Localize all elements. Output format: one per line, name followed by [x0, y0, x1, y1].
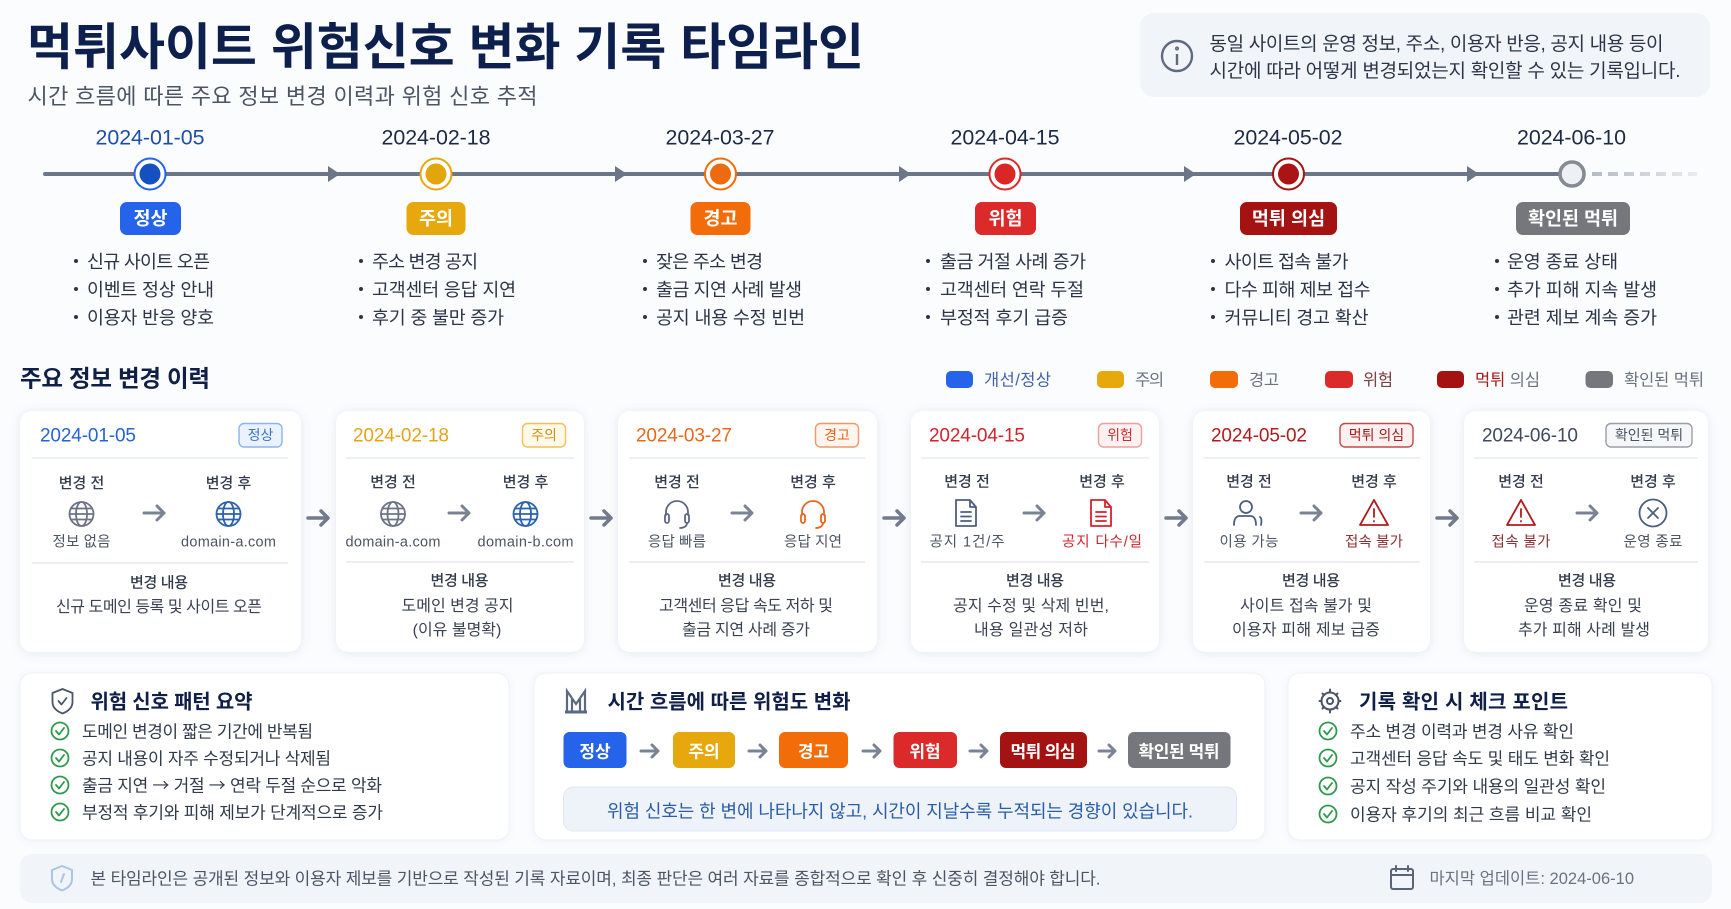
milestone 2024-03-27: 2024-03-27 — [666, 126, 774, 150]
icon: document after — [1091, 500, 1111, 526]
milestone 2024-02-18: 주소 변경 공지 — [372, 251, 478, 272]
panel: checkpoints: 기록 확인 시 체크 포인트 — [1359, 690, 1568, 714]
footer — [20, 854, 1712, 903]
card: 2024-05-02: 2024-05-02 — [1211, 426, 1307, 446]
card: 2024-05-02 — [1193, 411, 1430, 652]
checklist: 공지 내용이 자주 수정되거나 삭제됨 — [82, 750, 331, 768]
arrow — [1166, 511, 1186, 525]
milestone 2024-05-02: 먹튀 의심 — [1252, 208, 1325, 229]
checklist: 고객센터 응답 속도 및 태도 변화 확인 — [1350, 750, 1610, 768]
icon: document before — [956, 500, 976, 526]
card: 2024-05-02: 변경 전 — [1226, 474, 1272, 490]
card: 2024-04-15: 공지 1건/주 — [930, 534, 1004, 550]
card: 2024-03-27 — [618, 411, 877, 652]
milestone 2024-02-18: 2024-02-18 — [382, 126, 490, 150]
card: 2024-06-10: 2024-06-10 — [1482, 426, 1578, 446]
legend: 위험 — [1363, 370, 1393, 390]
note: 위험 신호는 한 변에 나타나지 않고, 시간이 지날수록 누적되는 경향이 있습니다. — [607, 802, 1193, 822]
milestone 2024-05-02: 다수 피해 제보 접수 — [1224, 279, 1370, 300]
card: 2024-01-05: 2024-01-05 — [40, 426, 136, 446]
milestone 2024-05-02: 2024-05-02 — [1234, 126, 1342, 150]
card: 2024-06-10: 추가 피해 사례 발생 — [1518, 621, 1650, 639]
card: 2024-03-27: 변경 후 — [790, 474, 836, 491]
legend: 주의 — [1135, 370, 1164, 390]
card: 2024-01-05: 변경 내용 — [130, 574, 188, 592]
panel: risk pattern summary — [20, 673, 509, 840]
icon: globe before — [381, 502, 405, 526]
milestone 2024-03-27 — [643, 126, 805, 328]
checklist: 주소 변경 이력과 변경 사유 확인 — [1350, 722, 1574, 742]
card: 2024-04-15: 공지 수정 및 삭제 빈번, — [953, 597, 1109, 615]
milestone 2024-04-15: 2024-04-15 — [950, 126, 1060, 150]
stage flow: 주의 — [688, 742, 720, 762]
milestone 2024-05-02: 커뮤니티 경고 확산 — [1224, 307, 1369, 328]
checklist — [1320, 722, 1610, 824]
card: 2024-03-27: 출금 지연 사례 증가 — [682, 621, 810, 639]
stage flow: 먹튀 의심 — [1010, 742, 1076, 762]
icon: chart — [565, 691, 587, 712]
checklist: 도메인 변경이 짧은 기간에 반복됨 — [82, 722, 313, 742]
card: 2024-03-27: 고객센터 응답 속도 저하 및 — [659, 597, 833, 615]
card: 2024-03-27: 응답 지연 — [784, 534, 842, 550]
stage flow — [564, 732, 1230, 768]
checklist: 출금 지연 → 거절 → 연락 두절 순으로 악화 — [82, 772, 382, 796]
card: 2024-01-05: 정상 — [248, 427, 273, 443]
card: 2024-04-15 — [911, 411, 1159, 652]
timeline axis — [45, 166, 1697, 182]
legend — [946, 370, 1704, 390]
card: 2024-03-27: 변경 내용 — [718, 572, 776, 590]
card: 2024-06-10: 변경 후 — [1630, 474, 1676, 490]
card: 2024-06-10 — [1464, 411, 1708, 652]
card: 2024-01-05: domain-a.com — [181, 534, 276, 550]
card: 2024-01-05: 변경 후 — [206, 475, 251, 492]
card: 2024-02-18: domain-b.com — [478, 534, 574, 550]
milestone 2024-02-18: 주의 — [419, 208, 453, 229]
card: 2024-06-10: 확인된 먹튀 — [1615, 427, 1683, 443]
milestone 2024-03-27: 출금 지연 사례 발생 — [656, 279, 802, 300]
icon: closed circle — [1640, 500, 1666, 526]
milestone 2024-04-15 — [926, 126, 1086, 328]
icon: warning — [1507, 500, 1535, 525]
icon: footer shield — [52, 866, 72, 890]
arrow — [591, 511, 611, 525]
milestone 2024-04-15: 고객센터 연락 두절 — [940, 279, 1084, 300]
icon: shield — [52, 689, 72, 714]
icon: globe before — [70, 502, 94, 526]
card: 2024-03-27: 응답 빠름 — [648, 534, 706, 550]
panel: risk change over time — [534, 673, 1265, 840]
milestone 2024-06-10: 관련 제보 계속 증가 — [1507, 307, 1657, 328]
milestone 2024-01-05: 이벤트 정상 안내 — [87, 279, 214, 300]
card: 2024-05-02: 변경 내용 — [1282, 572, 1340, 590]
milestone 2024-03-27: 경고 — [703, 208, 738, 229]
milestone 2024-05-02 — [1211, 126, 1370, 328]
milestone 2024-02-18: 고객센터 응답 지연 — [372, 279, 516, 300]
milestone 2024-03-27: 잦은 주소 변경 — [656, 251, 763, 272]
milestone 2024-04-15: 출금 거절 사례 증가 — [940, 251, 1086, 272]
card: 2024-01-05: 신규 도메인 등록 및 사이트 오픈 — [56, 598, 262, 616]
footer: 마지막 업데이트: 2024-06-10 — [1430, 869, 1634, 888]
card: 2024-04-15: 공지 다수/일 — [1062, 534, 1142, 550]
card: 2024-06-10: 운영 종료 확인 및 — [1524, 597, 1642, 615]
icon: headset after — [801, 501, 825, 528]
milestone 2024-03-27: 공지 내용 수정 빈번 — [656, 307, 805, 328]
milestone 2024-01-05: 이용자 반응 양호 — [87, 307, 214, 328]
milestone 2024-06-10: 운영 종료 상태 — [1507, 251, 1618, 272]
icon: headset before — [665, 501, 689, 528]
card: 2024-04-15: 내용 일관성 저하 — [974, 621, 1088, 639]
callout text: 동일 사이트의 운영 정보, 주소, 이용자 반응, 공지 내용 등이 — [1210, 33, 1664, 55]
card: 2024-05-02: 접속 불가 — [1345, 534, 1403, 550]
section heading: 주요 정보 변경 이력 — [20, 366, 210, 392]
card: 2024-04-15: 변경 전 — [944, 474, 990, 490]
milestone 2024-06-10: 확인된 먹튀 — [1528, 208, 1618, 229]
stage flow: 확인된 먹튀 — [1138, 742, 1220, 762]
stage flow: 경고 — [798, 742, 829, 762]
callout text: 시간에 따라 어떻게 변경되었는지 확인할 수 있는 기록입니다. — [1210, 60, 1680, 82]
icon: info — [1162, 41, 1192, 71]
milestone 2024-01-05: 정상 — [133, 208, 168, 229]
icon: globe after — [216, 502, 240, 526]
panel: checkpoints — [1288, 673, 1712, 840]
card: 2024-01-05: 변경 전 — [59, 475, 104, 492]
stage flow: 위험 — [909, 742, 941, 762]
card: 2024-04-15: 변경 후 — [1079, 474, 1125, 490]
note — [564, 787, 1236, 831]
icon: user — [1234, 501, 1262, 525]
milestone 2024-02-18 — [359, 126, 516, 328]
milestone 2024-06-10 — [1495, 126, 1657, 328]
milestone 2024-04-15: 부정적 후기 급증 — [940, 307, 1068, 328]
card: 2024-02-18: domain-a.com — [346, 534, 440, 550]
legend: 경고 — [1249, 370, 1279, 390]
card: 2024-05-02: 먹튀 의심 — [1349, 427, 1404, 443]
timeline — [45, 126, 1697, 328]
card: 2024-02-18: 도메인 변경 공지 — [402, 597, 513, 615]
card: 2024-02-18: 변경 내용 — [430, 572, 489, 590]
arrow — [308, 511, 328, 525]
stage flow: 정상 — [579, 742, 611, 762]
panel: risk change over time: 시간 흐름에 따른 위험도 변화 — [608, 690, 850, 714]
milestone 2024-06-10: 추가 피해 지속 발생 — [1507, 279, 1657, 300]
card: 2024-03-27: 2024-03-27 — [636, 426, 732, 446]
icon: calendar — [1391, 866, 1413, 889]
card: 2024-04-15: 변경 내용 — [1006, 572, 1064, 590]
subtitle: 시간 흐름에 따른 주요 정보 변경 이력과 위험 신호 추적 — [28, 84, 538, 109]
card: 2024-02-18: 2024-02-18 — [353, 426, 449, 446]
icon: gear — [1320, 690, 1340, 712]
footer: 본 타임라인은 공개된 정보와 이용자 제보를 기반으로 작성된 기록 자료이며, 최종 판단은 여러 자료를 종합적으로 확인 후 신중히 결정해야 합니다. — [90, 870, 1100, 888]
callout text — [1210, 33, 1680, 82]
card: 2024-06-10: 운영 종료 — [1624, 534, 1682, 550]
milestone 2024-02-18: 후기 중 불만 증가 — [372, 307, 504, 328]
card: 2024-04-15: 2024-04-15 — [929, 426, 1025, 446]
legend: 먹튀 의심 — [1475, 370, 1540, 390]
info callout — [1140, 13, 1710, 97]
checklist: 부정적 후기와 피해 제보가 단계적으로 증가 — [82, 804, 383, 822]
card: 2024-06-10: 변경 내용 — [1558, 572, 1616, 590]
card: 2024-02-18: (이유 불명확) — [413, 621, 501, 639]
checklist — [52, 722, 383, 822]
card: 2024-03-27: 변경 전 — [654, 474, 700, 491]
milestone 2024-06-10: 2024-06-10 — [1517, 126, 1626, 150]
milestone 2024-01-05: 2024-01-05 — [96, 126, 204, 150]
card: 2024-05-02: 이용자 피해 제보 급증 — [1232, 621, 1380, 639]
title: 먹튀사이트 위험신호 변화 기록 타임라인 — [27, 20, 864, 76]
arrow — [884, 511, 904, 525]
card: 2024-06-10: 변경 전 — [1498, 474, 1544, 490]
card: 2024-01-05 — [20, 411, 301, 652]
milestone 2024-01-05: 신규 사이트 오픈 — [87, 251, 210, 272]
card: 2024-06-10: 접속 불가 — [1492, 534, 1550, 550]
legend: 확인된 먹튀 — [1624, 370, 1704, 390]
arrow — [1437, 511, 1457, 525]
card: 2024-01-05: 정보 없음 — [52, 534, 110, 550]
checklist: 이용자 후기의 최근 흐름 비교 확인 — [1350, 806, 1592, 824]
milestone 2024-05-02: 사이트 접속 불가 — [1224, 251, 1349, 272]
card: 2024-04-15: 위험 — [1107, 427, 1133, 443]
card: 2024-02-18: 변경 전 — [370, 474, 416, 491]
card: 2024-05-02: 이용 가능 — [1220, 534, 1278, 550]
legend: 개선/정상 — [984, 370, 1051, 390]
card: 2024-02-18: 주의 — [531, 427, 557, 443]
milestone 2024-04-15: 위험 — [988, 208, 1023, 229]
icon: warning — [1360, 500, 1388, 525]
card: 2024-02-18 — [336, 411, 584, 652]
card: 2024-03-27: 경고 — [824, 427, 850, 443]
panel: risk pattern summary: 위험 신호 패턴 요약 — [90, 690, 252, 714]
milestone 2024-01-05 — [74, 126, 214, 328]
icon: globe after — [514, 502, 538, 526]
card: 2024-02-18: 변경 후 — [503, 474, 548, 491]
card: 2024-05-02: 변경 후 — [1351, 474, 1397, 490]
checklist: 공지 작성 주기와 내용의 일관성 확인 — [1350, 778, 1606, 796]
card: 2024-05-02: 사이트 접속 불가 및 — [1240, 597, 1372, 615]
